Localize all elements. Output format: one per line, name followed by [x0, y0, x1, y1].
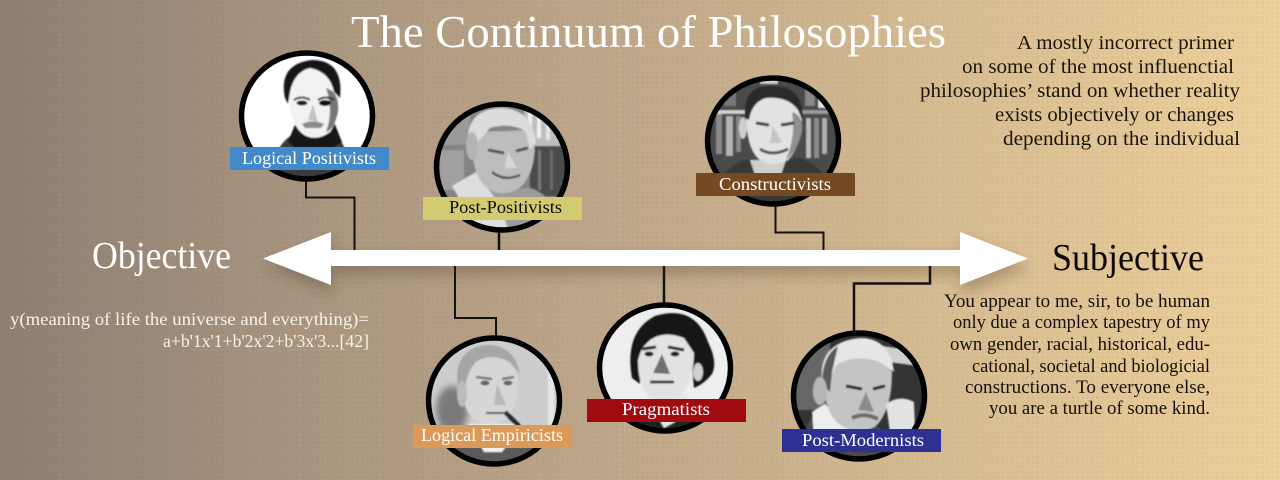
text block: formula: a+b'1x'1+b'2x'2+b'3x'3...[42]	[163, 331, 369, 351]
heading: Subjective: Subjective	[1052, 237, 1204, 279]
node: Logical Positivists	[230, 48, 389, 184]
connector lines	[306, 178, 930, 338]
node: Pragmatists	[587, 299, 746, 435]
text block: primer description: on some of the most influenctial	[962, 56, 1234, 78]
text block: subjective quote: constructions. To everyone else,	[965, 377, 1210, 398]
ring	[436, 104, 568, 230]
text block: subjective quote: only due a complex tapestry of my	[953, 312, 1210, 333]
node: Constructivists	[696, 72, 855, 208]
text block: primer description: depending on the individual	[1003, 128, 1240, 150]
label	[423, 197, 582, 220]
text block: primer description	[920, 32, 1240, 150]
text block: formula: y(meaning of life the universe and everything)=	[10, 309, 369, 330]
portrait: Constructivists	[710, 80, 836, 202]
node: Post-Positivists	[423, 98, 582, 235]
title: The Continuum of Philosophies	[351, 6, 946, 57]
node: Post-Modernists	[782, 327, 941, 463]
text block: subjective quote: cational, societal and biologicial	[972, 356, 1210, 377]
ring	[708, 78, 838, 204]
label: Logical Empiricists	[421, 425, 563, 445]
text block: subjective quote	[944, 291, 1210, 419]
text block: primer description: A mostly incorrect primer	[1017, 32, 1234, 54]
text block: primer description: philosophies’ stand on whether reality	[920, 80, 1240, 102]
label: Constructivists	[719, 174, 831, 194]
label: Post-Modernists	[802, 430, 924, 450]
ring	[794, 333, 924, 459]
text block: primer description: exists objectively or changes	[995, 104, 1234, 126]
node: Logical Empiricists	[413, 332, 572, 468]
portrait: Post-Positivists	[439, 106, 565, 228]
heading: Objective: Objective	[92, 235, 231, 277]
label: Logical Positivists	[242, 148, 376, 168]
ring	[600, 305, 730, 431]
text block: formula	[10, 309, 369, 351]
label	[696, 173, 855, 196]
text block: subjective quote: own gender, racial, historical, edu-	[950, 334, 1210, 355]
portrait: Pragmatists	[602, 308, 728, 428]
portrait: Logical Positivists	[244, 56, 370, 176]
label: Post-Positivists	[449, 197, 562, 217]
portrait: Post-Modernists	[796, 336, 922, 456]
label	[587, 399, 746, 422]
ring	[428, 338, 560, 464]
ring	[242, 53, 372, 179]
double-headed arrow: objective to subjective	[263, 232, 1028, 285]
label	[782, 429, 941, 452]
text block: subjective quote: you are a turtle of some kind.	[989, 398, 1210, 419]
portrait: Logical Empiricists	[431, 340, 557, 462]
label: Pragmatists	[622, 399, 710, 419]
text block: subjective quote: You appear to me, sir, to be human	[944, 291, 1210, 312]
